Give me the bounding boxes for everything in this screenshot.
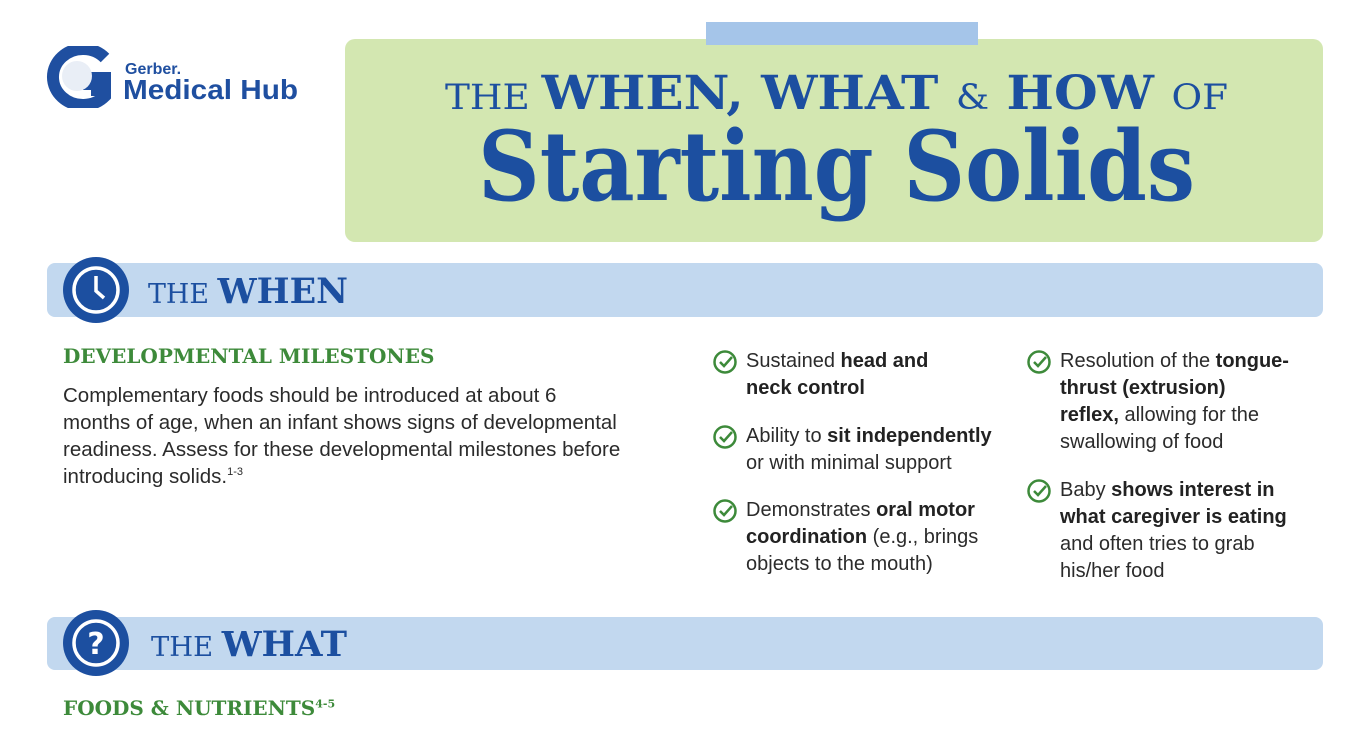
tape <box>706 22 978 45</box>
title panel <box>345 39 1323 242</box>
item: objects to the mouth) <box>746 553 933 575</box>
heading: developmental milestones: DEVELOPMENTAL MILESTONES <box>63 344 434 368</box>
checklist col1 <box>713 350 992 575</box>
item: what caregiver is eating <box>1060 506 1287 528</box>
item: Demonstrates oral motor <box>746 499 975 521</box>
item: Baby shows interest in <box>1060 479 1275 501</box>
band: the when: THE WHEN <box>148 271 348 312</box>
checklist col2 <box>1027 350 1289 582</box>
heading: foods & nutrients: FOODS & NUTRIENTS4-5 <box>63 696 335 720</box>
title <box>445 66 1228 223</box>
logo: Gerber. <box>125 61 181 78</box>
item: and often tries to grab <box>1060 533 1255 555</box>
item: his/her food <box>1060 560 1165 582</box>
item: Resolution of the tongue- <box>1060 350 1289 372</box>
icon: question <box>63 610 129 676</box>
item <box>713 499 978 575</box>
paragraph: Complementary foods should be introduced at about 6 <box>63 384 556 407</box>
icon: G mark <box>53 49 105 105</box>
paragraph: months of age, when an infant shows signs of developmental <box>63 411 617 434</box>
item: coordination (e.g., brings <box>746 526 978 548</box>
item <box>1027 350 1289 453</box>
item: thrust (extrusion) <box>1060 377 1226 399</box>
icon: clock <box>63 257 129 323</box>
item <box>713 350 928 399</box>
icon: question: ? <box>87 627 105 662</box>
paragraph <box>63 384 620 488</box>
item <box>1027 479 1287 582</box>
item: reflex, allowing for the <box>1060 404 1259 426</box>
band: the what: THE WHAT <box>151 624 347 665</box>
item: or with minimal support <box>746 452 952 474</box>
item <box>713 425 992 474</box>
item: neck control <box>746 377 865 399</box>
logo <box>46 46 298 108</box>
band: the what <box>47 617 1323 670</box>
item: swallowing of food <box>1060 431 1223 453</box>
paragraph: introducing solids.1-3 <box>63 465 243 488</box>
item: Sustained head and <box>746 350 928 372</box>
logo: Medical Hub <box>123 74 298 105</box>
item: Ability to sit independently <box>746 425 992 447</box>
title: THE WHEN, WHAT & HOW OF <box>445 66 1228 121</box>
paragraph: readiness. Assess for these developmental milestones before <box>63 438 620 461</box>
band: the when <box>47 263 1323 317</box>
title: Starting Solids <box>478 110 1195 223</box>
